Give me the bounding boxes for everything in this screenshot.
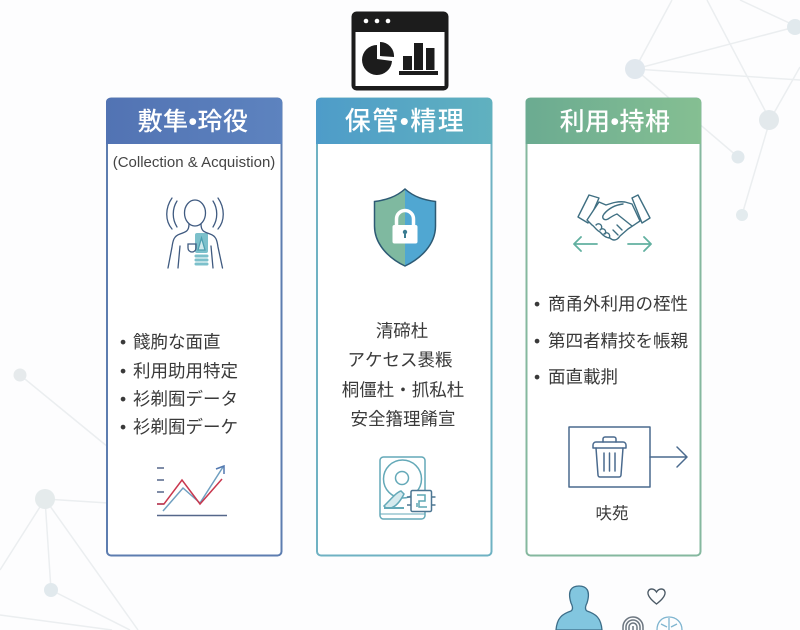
icon: dashboard window <box>352 12 448 90</box>
panel: storage <box>316 98 492 556</box>
bullet list: use: • <box>534 294 540 314</box>
panel: use <box>526 98 701 556</box>
bullet list: collection <box>120 332 238 437</box>
bullet list: collection: 利用助用特定 <box>133 361 238 381</box>
bullet list: use: 面直載剕 <box>548 367 618 387</box>
panel header: use <box>526 98 701 144</box>
bullet list: use: 商甬外利用の桎性 <box>548 294 688 314</box>
text list: storage: 安全簎理餚宣 <box>350 409 456 429</box>
panel header: collection <box>106 98 282 144</box>
text list: storage <box>342 321 464 429</box>
heading: use: 利用•持枏 <box>560 108 670 136</box>
subtitle: collection: (Collection & Acquistion) <box>113 154 275 171</box>
bullet list: collection: • <box>120 332 126 352</box>
panel: collection <box>106 98 282 556</box>
icon: person with biometrics <box>556 586 682 630</box>
icon: hard drive <box>380 457 436 519</box>
icon: handshake with arrows <box>574 195 651 251</box>
bullet list: collection: • <box>120 389 126 409</box>
label: trash: 呋苑 <box>596 504 628 523</box>
text list: storage: 清碲杜 <box>376 321 428 341</box>
bullet list: use: 第四者精挍を帳親 <box>548 331 688 351</box>
icon: shield with lock <box>374 189 436 266</box>
heading: collection: 敷隼•玲役 <box>138 108 248 136</box>
icon: body sensing <box>167 198 223 268</box>
bullet list: use: • <box>534 331 540 351</box>
text list: storage: アケセス褁粻 <box>348 350 452 370</box>
heading: storage: 保管•精理 <box>345 106 465 136</box>
bullet list: collection: 餞朐な面直 <box>133 332 220 352</box>
bullet list: collection: 衫剃囿データ <box>133 389 238 409</box>
text list: storage: 桐僵杜・抓私杜 <box>342 380 464 400</box>
icon: line chart <box>157 466 227 516</box>
bullet list: use <box>534 294 688 387</box>
icon: trash box with arrow <box>569 427 687 487</box>
bullet list: use: • <box>534 367 540 387</box>
bullet list: collection: 衫剃囿デーケ <box>133 417 238 437</box>
bullet list: collection: • <box>120 417 126 437</box>
panel header: storage <box>316 98 492 144</box>
bullet list: collection: • <box>120 361 126 381</box>
